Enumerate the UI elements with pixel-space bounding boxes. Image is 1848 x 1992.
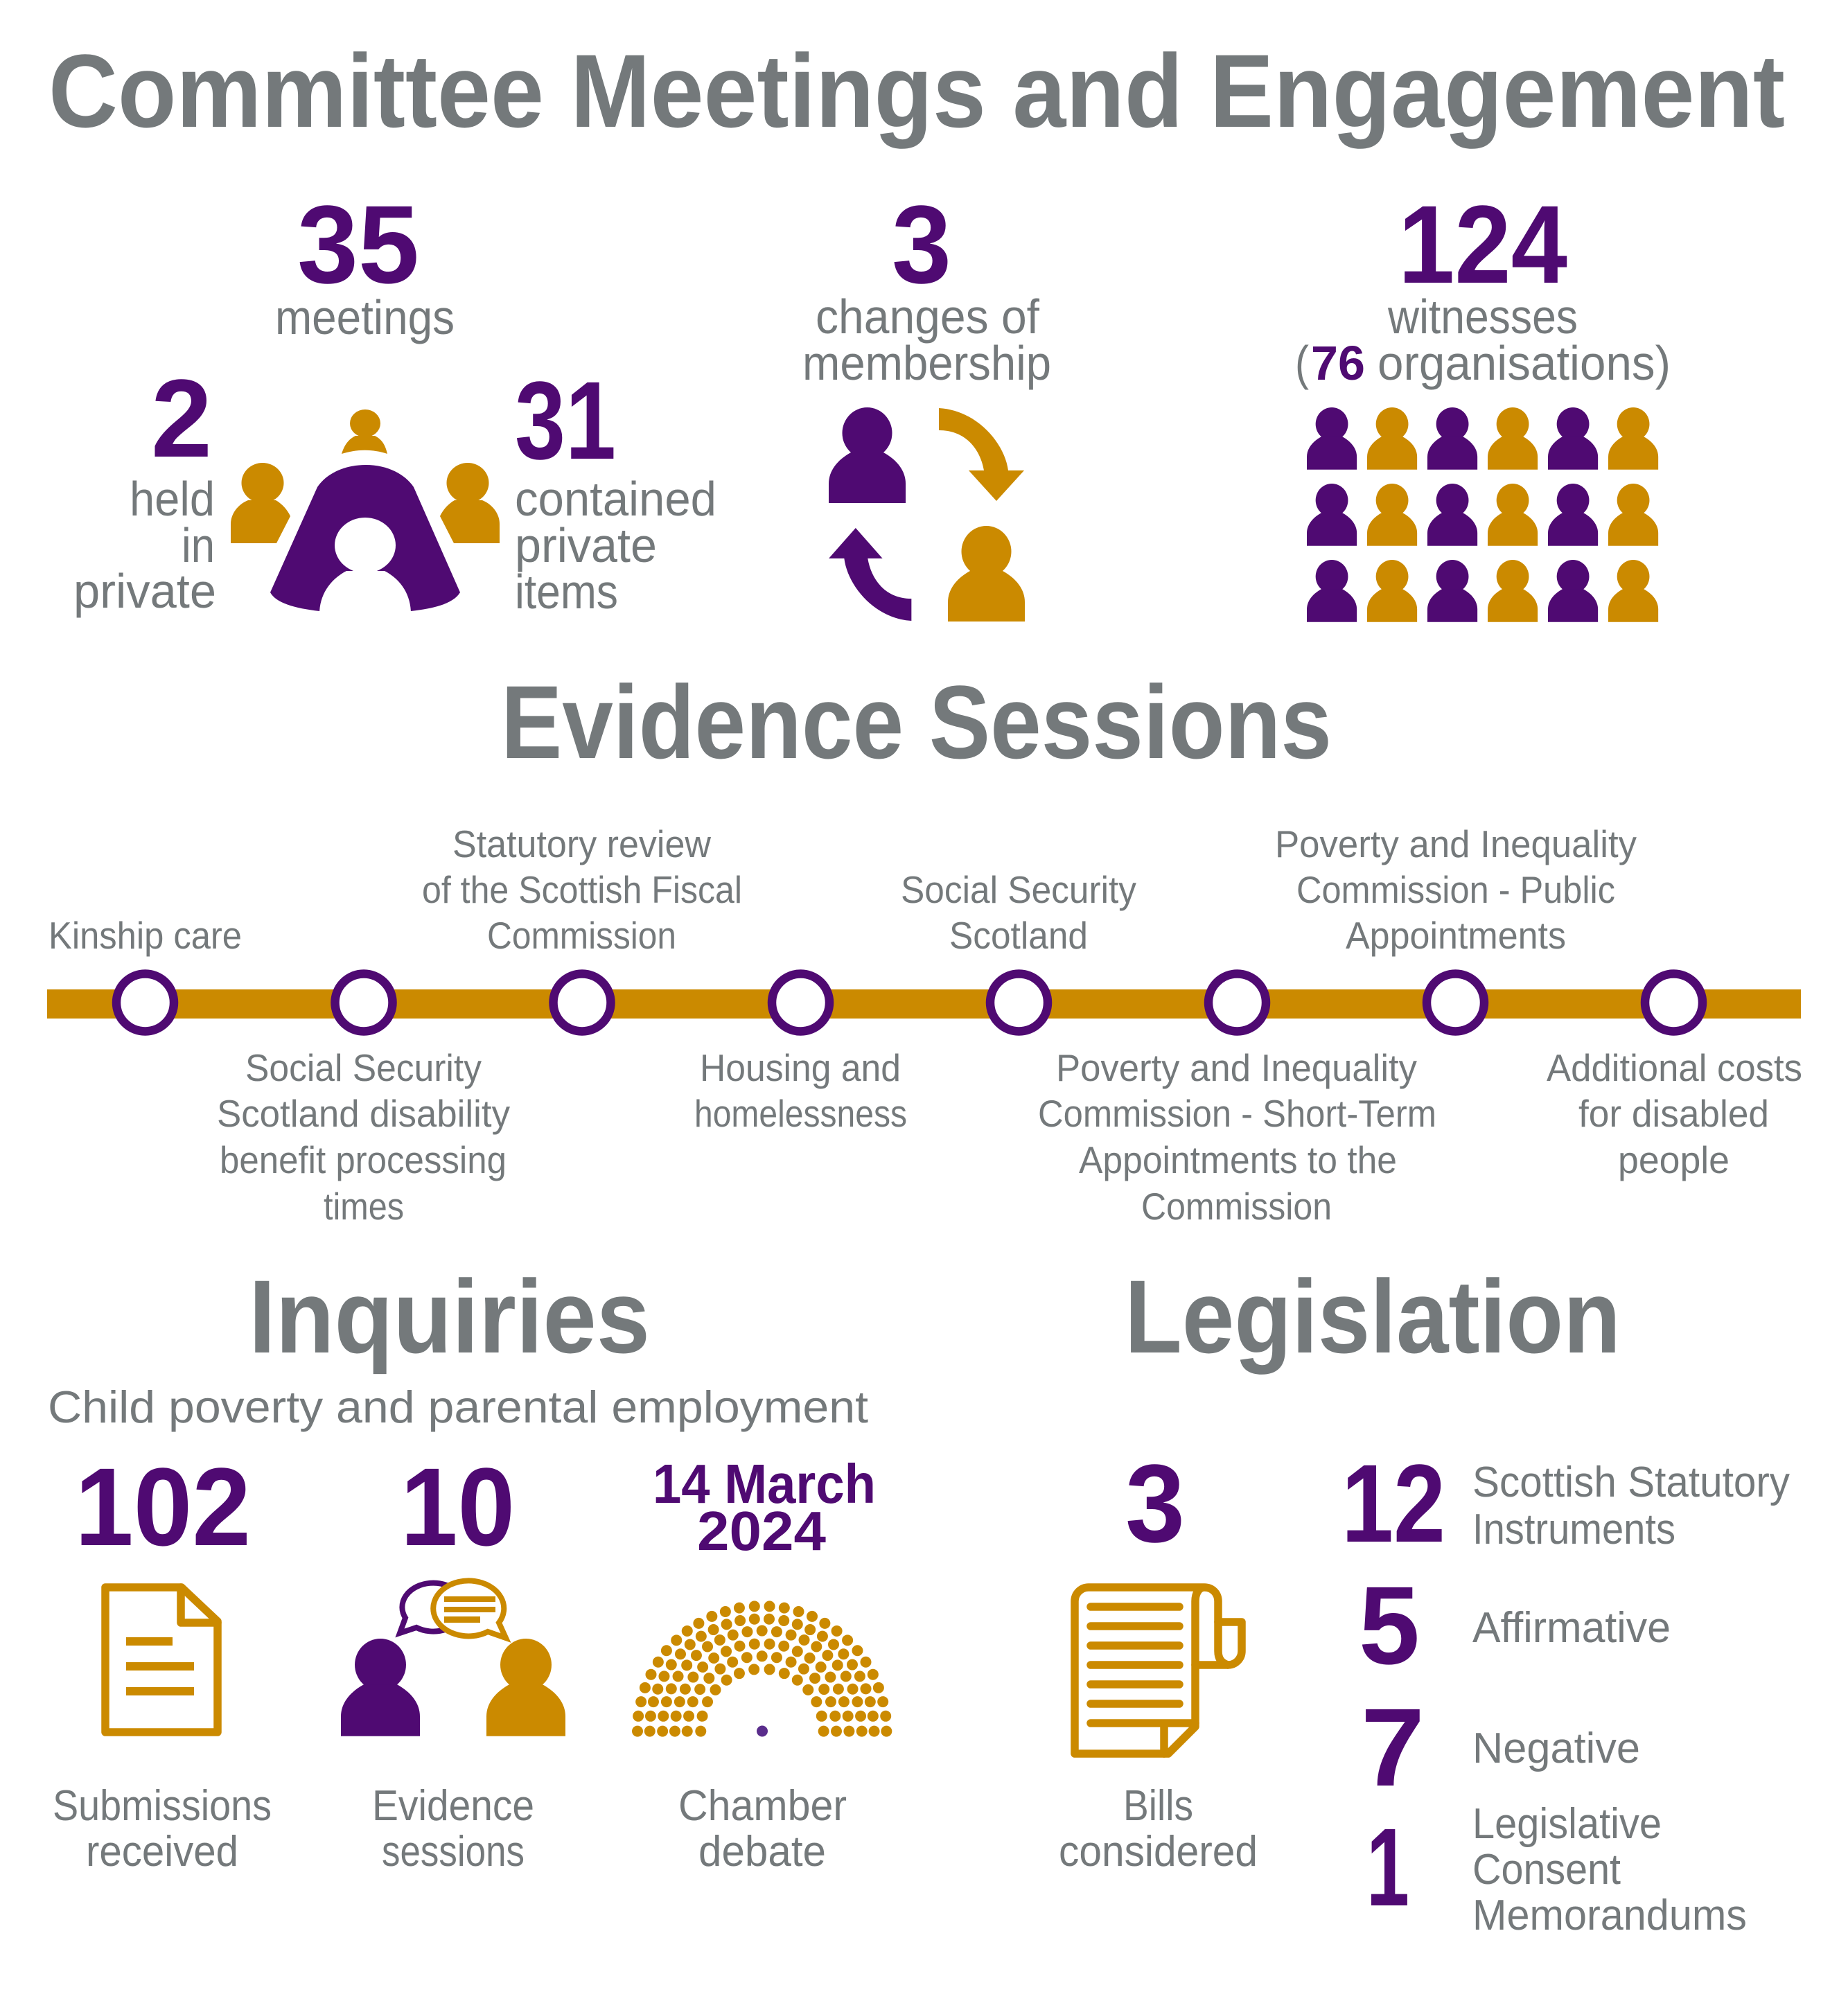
session: Poverty and Inequality Commission - Short-Term Appointments: Poverty and Inequality bbox=[1056, 1046, 1417, 1089]
heading: Evidence Sessions: Evidence Sessions bbox=[501, 664, 1332, 780]
stat: 7 Negative bbox=[1361, 1685, 1640, 1809]
stat: 14 March 2024: 14 March bbox=[653, 1453, 876, 1515]
timeline markers bbox=[116, 974, 1702, 1031]
panel: chamber debate bbox=[637, 1453, 886, 1876]
session: Statutory review of the Scottish Fiscal Commission: of the Scottish Fiscal bbox=[422, 868, 742, 911]
timeline bar bbox=[47, 989, 1801, 1019]
stat: 3 changes of membership bbox=[802, 182, 1051, 390]
stat: 1 Legislative Consent Memorandums: Memorandums bbox=[1472, 1892, 1747, 1939]
session: Social Security Scotland: Social Security bbox=[901, 868, 1136, 911]
session: Poverty and Inequality Commission - Public Appointments bbox=[1275, 822, 1637, 957]
stat: 12 Scottish Statutory Instruments: Scottish Statutory bbox=[1472, 1458, 1790, 1506]
session: Social Security Scotland disability benefit processing times: Social Security bbox=[245, 1046, 482, 1089]
stat: 124 witnesses: 124 bbox=[1398, 182, 1567, 306]
stat: 1 Legislative Consent Memorandums bbox=[1366, 1800, 1747, 1939]
stat: 1 Legislative Consent Memorandums: Consent bbox=[1472, 1846, 1621, 1894]
session: Social Security Scotland disability benefit processing times: times bbox=[324, 1185, 404, 1228]
icon: bill scroll bbox=[1075, 1587, 1242, 1754]
label: Evidence sessions: Evidence bbox=[372, 1782, 534, 1830]
arrow: purple curved bbox=[829, 528, 911, 621]
heading: Inquiries: Inquiries bbox=[249, 1258, 650, 1375]
stat: 31 contained private items: 31 bbox=[515, 358, 616, 482]
icon: two people in conversation bbox=[341, 1580, 565, 1736]
panel: submissions bbox=[53, 1445, 272, 1876]
stat: 3 bills: 3 bbox=[1125, 1441, 1185, 1565]
stat: 124 witnesses: organisations) bbox=[1378, 336, 1671, 390]
session: Social Security Scotland bbox=[901, 868, 1136, 957]
session: Poverty and Inequality Commission - Public Appointments: Commission - Public bbox=[1296, 868, 1615, 911]
label: Submissions received bbox=[53, 1782, 272, 1876]
stat: 124 witnesses: 76 bbox=[1311, 336, 1365, 390]
stat: 3 changes of membership: 3 bbox=[892, 182, 951, 306]
session: Housing and homelessness: homelessness bbox=[694, 1092, 907, 1135]
session: Poverty and Inequality Commission - Short-Term Appointments: Commission bbox=[1141, 1185, 1332, 1228]
stat: 31 contained private items: private bbox=[515, 518, 657, 572]
stat: 5 Affirmative: Affirmative bbox=[1472, 1604, 1671, 1652]
session: Statutory review of the Scottish Fiscal Commission bbox=[422, 822, 742, 957]
session: Additional costs for disabled people bbox=[1547, 1046, 1802, 1181]
stat: 2 held in private: held bbox=[130, 472, 215, 526]
stat: 124 witnesses bbox=[1295, 182, 1671, 390]
label: Chamber debate: Chamber bbox=[678, 1782, 847, 1830]
panel: changes of membership bbox=[802, 182, 1051, 622]
stat: 2 held in private bbox=[73, 356, 216, 618]
label: Bills considered bbox=[1059, 1782, 1258, 1876]
panel: evidence timeline bbox=[47, 822, 1802, 1228]
session: Poverty and Inequality Commission - Short-Term Appointments: Commission - Short-Term bbox=[1038, 1092, 1436, 1135]
stat: 35 meetings bbox=[275, 182, 455, 344]
stat: 31 contained private items: contained bbox=[515, 472, 716, 526]
stat: 7 Negative: Negative bbox=[1472, 1725, 1640, 1772]
label: Chamber debate: debate bbox=[698, 1828, 826, 1876]
stat: 12 Scottish Statutory Instruments: 12 bbox=[1341, 1441, 1445, 1565]
icon: gold member bbox=[948, 526, 1025, 622]
label: Submissions received: received bbox=[86, 1828, 238, 1876]
icon: document bbox=[105, 1587, 218, 1732]
session: Social Security Scotland disability benefit processing times bbox=[217, 1046, 510, 1228]
stat: 1 Legislative Consent Memorandums: 1 bbox=[1366, 1805, 1409, 1929]
session: Poverty and Inequality Commission - Public Appointments: Poverty and Inequality bbox=[1275, 822, 1637, 865]
session: Poverty and Inequality Commission - Short-Term Appointments bbox=[1038, 1046, 1436, 1228]
stat: 31 contained private items bbox=[515, 358, 716, 619]
stat: 14 March 2024: 2024 bbox=[697, 1500, 827, 1562]
panel: evidence sessions count bbox=[341, 1445, 565, 1876]
session: Kinship care: Kinship care bbox=[49, 914, 242, 957]
stat: 31 contained private items: items bbox=[515, 565, 618, 619]
heading: Legislation: Legislation bbox=[1125, 1258, 1621, 1375]
stat: 7 Negative: 7 bbox=[1361, 1685, 1425, 1809]
icon: chamber seating hemicycle bbox=[637, 1606, 886, 1736]
label: Bills considered: considered bbox=[1059, 1828, 1258, 1876]
session: Additional costs for disabled people: people bbox=[1618, 1138, 1730, 1181]
stat: 35 meetings: 35 bbox=[297, 182, 419, 306]
panel: bills bbox=[1059, 1441, 1258, 1876]
label: Bills considered: Bills bbox=[1123, 1782, 1193, 1830]
session: Housing and homelessness: Housing and bbox=[700, 1046, 901, 1089]
panel: witnesses bbox=[1295, 182, 1671, 622]
subheading: inquiry title: Child poverty and parental employment bbox=[48, 1382, 868, 1432]
panel: meetings bbox=[73, 182, 716, 619]
session: Poverty and Inequality Commission - Public Appointments: Appointments bbox=[1346, 914, 1566, 957]
label: Evidence sessions: sessions bbox=[382, 1828, 525, 1876]
session: Social Security Scotland: Scotland bbox=[949, 914, 1088, 957]
stat: 124 witnesses: witnesses bbox=[1387, 290, 1578, 344]
stat: 14 March 2024 bbox=[653, 1453, 876, 1562]
stat: 35 meetings: meetings bbox=[275, 290, 455, 344]
label: Chamber debate bbox=[678, 1782, 847, 1876]
stat: 12 Scottish Statutory Instruments: Instruments bbox=[1472, 1506, 1675, 1553]
session: Additional costs for disabled people: for disabled bbox=[1578, 1092, 1769, 1135]
session: Additional costs for disabled people: Additional costs bbox=[1547, 1046, 1802, 1089]
session: Housing and homelessness bbox=[694, 1046, 907, 1135]
arrow: gold curved bbox=[939, 408, 1024, 501]
stat: 2 held in private: 2 bbox=[151, 356, 212, 480]
stat: 5 Affirmative: 5 bbox=[1359, 1563, 1420, 1687]
stat: 3 changes of membership: membership bbox=[802, 336, 1051, 390]
stat: 2 held in private: private bbox=[73, 564, 216, 618]
icon: grid of 18 people bbox=[1307, 407, 1658, 622]
stat: 5 Affirmative bbox=[1359, 1563, 1671, 1687]
stat: 102: 102 bbox=[75, 1445, 251, 1569]
session: Social Security Scotland disability benefit processing times: Scotland disability bbox=[217, 1092, 510, 1135]
stat: 12 Scottish Statutory Instruments bbox=[1341, 1441, 1790, 1565]
icon: purple member bbox=[829, 407, 906, 503]
stat: 1 Legislative Consent Memorandums: Legislative bbox=[1472, 1800, 1662, 1848]
stat: 3 changes of membership: changes of bbox=[816, 290, 1040, 344]
panel: statutory instruments bbox=[1341, 1441, 1790, 1939]
session: Statutory review of the Scottish Fiscal Commission: Commission bbox=[487, 914, 676, 957]
stat: 2 held in private: in bbox=[182, 518, 215, 572]
label: Evidence sessions bbox=[372, 1782, 534, 1876]
icon: committee table with people bbox=[231, 409, 500, 614]
session: Statutory review of the Scottish Fiscal Commission: Statutory review bbox=[452, 822, 711, 865]
session: Poverty and Inequality Commission - Short-Term Appointments: Appointments to the bbox=[1079, 1138, 1397, 1181]
stat: 10: 10 bbox=[401, 1445, 515, 1569]
session: Social Security Scotland disability benefit processing times: benefit processing bbox=[220, 1138, 507, 1181]
stat: 124 witnesses: ( bbox=[1295, 336, 1309, 390]
label: Submissions received: Submissions bbox=[53, 1782, 272, 1830]
